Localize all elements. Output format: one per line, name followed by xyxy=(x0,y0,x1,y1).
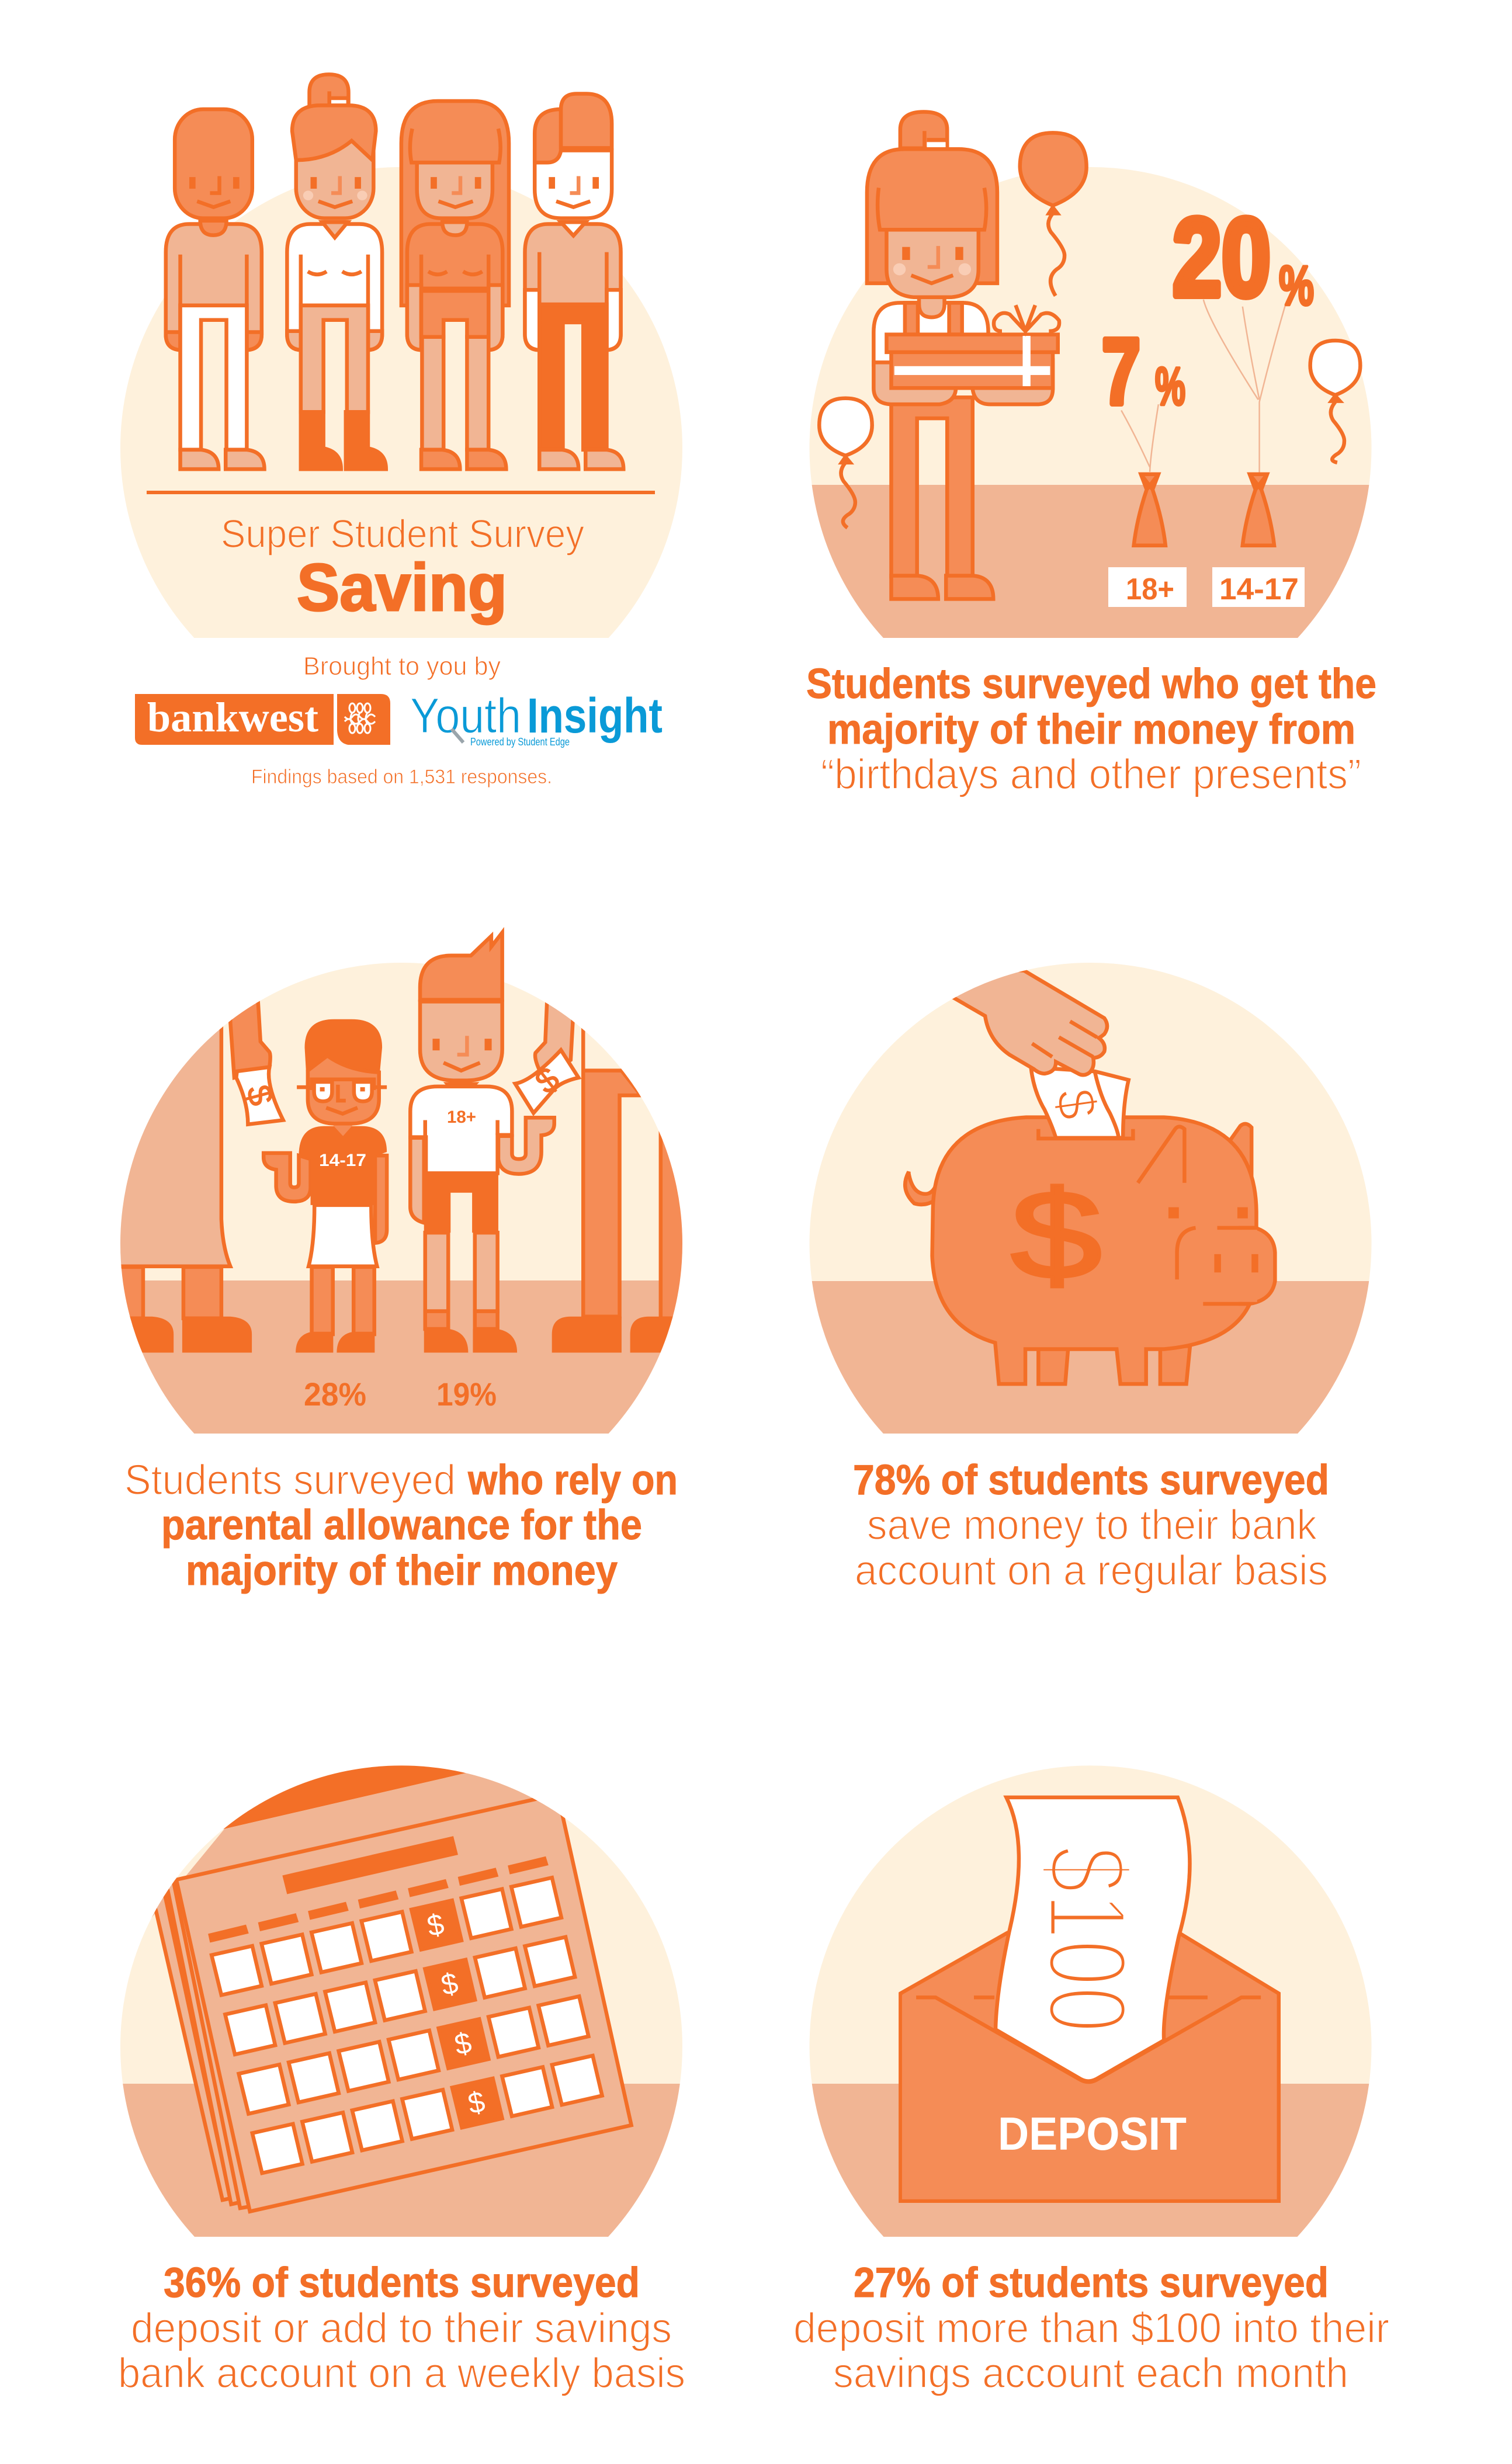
background circle with ground xyxy=(806,1765,1379,2241)
caption xyxy=(793,2260,1389,2397)
balloon number 7%: 7 xyxy=(1102,319,1140,424)
main heading: Saving xyxy=(297,551,507,625)
background circle with ground xyxy=(117,1765,689,2241)
brought to you by: Brought to you by xyxy=(303,652,501,681)
logo: YouthInsight: Insight xyxy=(527,688,663,743)
logo: bankwest: bankwest xyxy=(147,694,318,741)
calendar dollar signs: $ xyxy=(424,1907,447,1943)
background circle with ground xyxy=(806,167,1379,643)
balloon: white left xyxy=(819,398,872,527)
dollar on left bill: $ xyxy=(239,1081,280,1109)
caption: 78% of students surveyed xyxy=(853,1457,1329,1504)
panel: deposit envelope xyxy=(793,1765,1389,2397)
logo: bankwest xyxy=(135,694,390,745)
caption: deposit or add to their savings xyxy=(131,2305,672,2352)
caption: majority of their money xyxy=(186,1547,618,1594)
balloon: white right xyxy=(1310,341,1360,463)
caption: savings account each month xyxy=(833,2350,1348,2397)
calendar page contents xyxy=(208,1836,602,2173)
balloon number 20%: % xyxy=(1279,255,1314,317)
caption: who rely on xyxy=(467,1457,678,1504)
background circle with ground xyxy=(806,963,1379,1439)
ground line xyxy=(147,491,655,494)
envelope front xyxy=(902,1995,1277,2199)
envelope flap lines xyxy=(974,1996,1208,1999)
calendar dollar signs xyxy=(424,1907,488,2121)
caption: parental allowance for the xyxy=(161,1502,642,1549)
weight bag 18+ xyxy=(1134,474,1166,546)
student 2 xyxy=(287,74,386,469)
bill left xyxy=(236,1067,283,1125)
label 14-17: 14-17 xyxy=(1219,572,1299,606)
panel: birthdays and presents xyxy=(806,112,1379,798)
boy 18+ xyxy=(410,932,554,1353)
panel: calendar xyxy=(117,1740,689,2397)
four students xyxy=(166,74,623,469)
calendar dollar signs: $ xyxy=(465,2085,488,2121)
balloon: orange xyxy=(1020,133,1087,296)
bill fold xyxy=(1095,1073,1118,1137)
panel: piggy bank xyxy=(806,963,1379,1594)
caption xyxy=(853,1457,1329,1594)
caption xyxy=(124,1457,678,1594)
caption: Students surveyed who get the xyxy=(806,661,1376,707)
dollar on bill: $ xyxy=(1045,1085,1108,1123)
panel: parental allowance xyxy=(105,932,700,1594)
label 18+ on shirt: 18+ xyxy=(447,1108,476,1127)
student 3 xyxy=(401,101,509,469)
deposit label: DEPOSIT xyxy=(998,2108,1187,2160)
findings note: Findings based on 1,531 responses. xyxy=(251,766,552,788)
background circle xyxy=(120,167,682,638)
caption: majority of their money from xyxy=(827,706,1355,753)
adults clipped by circle xyxy=(105,996,700,1353)
logo: YouthInsight xyxy=(410,688,663,748)
calendar cover and back pages xyxy=(137,1740,632,2212)
girl 14-17 xyxy=(263,1019,387,1353)
deposit slip xyxy=(996,1797,1190,2081)
caption: bank account on a weekly basis xyxy=(118,2350,685,2397)
weight bag 14-17 xyxy=(1243,474,1274,546)
calendar dollar signs: $ xyxy=(452,2026,474,2062)
panel: title xyxy=(120,74,682,788)
amount on slip: $100 xyxy=(1025,1846,1150,2033)
coin slot xyxy=(1038,1129,1133,1139)
piggy bank xyxy=(905,1118,1275,1384)
label 18+ xyxy=(1108,567,1187,607)
balloon strings xyxy=(1121,300,1285,474)
calendar dollar signs: $ xyxy=(438,1966,461,2002)
person with gift xyxy=(867,112,1059,599)
background circle with ground xyxy=(117,963,689,1438)
caption: Students surveyed xyxy=(124,1457,456,1504)
caption: 27% of students surveyed xyxy=(854,2260,1329,2306)
student 4 xyxy=(525,94,623,469)
label 18+: 18+ xyxy=(1126,572,1174,606)
big dollar sign: $ xyxy=(1011,1164,1102,1305)
logo: YouthInsight: Youth xyxy=(410,688,521,743)
caption xyxy=(118,2260,685,2397)
caption: 36% of students surveyed xyxy=(164,2260,640,2306)
caption: save money to their bank xyxy=(867,1502,1317,1549)
caption: “birthdays and other presents” xyxy=(821,751,1361,798)
logo: YouthInsight: Powered by Student Edge xyxy=(470,736,570,748)
statistic 28%: 28% xyxy=(304,1376,366,1413)
student 1 xyxy=(166,109,265,469)
bill right xyxy=(515,1050,578,1113)
balloon number 7%: % xyxy=(1155,357,1185,417)
caption xyxy=(806,661,1376,798)
caption: account on a regular basis xyxy=(855,1547,1328,1594)
balloon number 20%: 20 xyxy=(1173,196,1271,320)
balloon number 7% xyxy=(1102,319,1185,424)
survey title: Super Student Survey xyxy=(221,512,584,556)
statistic 19%: 19% xyxy=(436,1376,497,1413)
label 14-17 on shirt: 14-17 xyxy=(319,1151,366,1170)
dollar bill xyxy=(1031,1067,1129,1138)
envelope back xyxy=(900,1933,1279,2201)
dollar on right bill: $ xyxy=(528,1060,566,1101)
hand xyxy=(948,964,1107,1075)
caption: deposit more than $100 into their xyxy=(793,2305,1389,2352)
